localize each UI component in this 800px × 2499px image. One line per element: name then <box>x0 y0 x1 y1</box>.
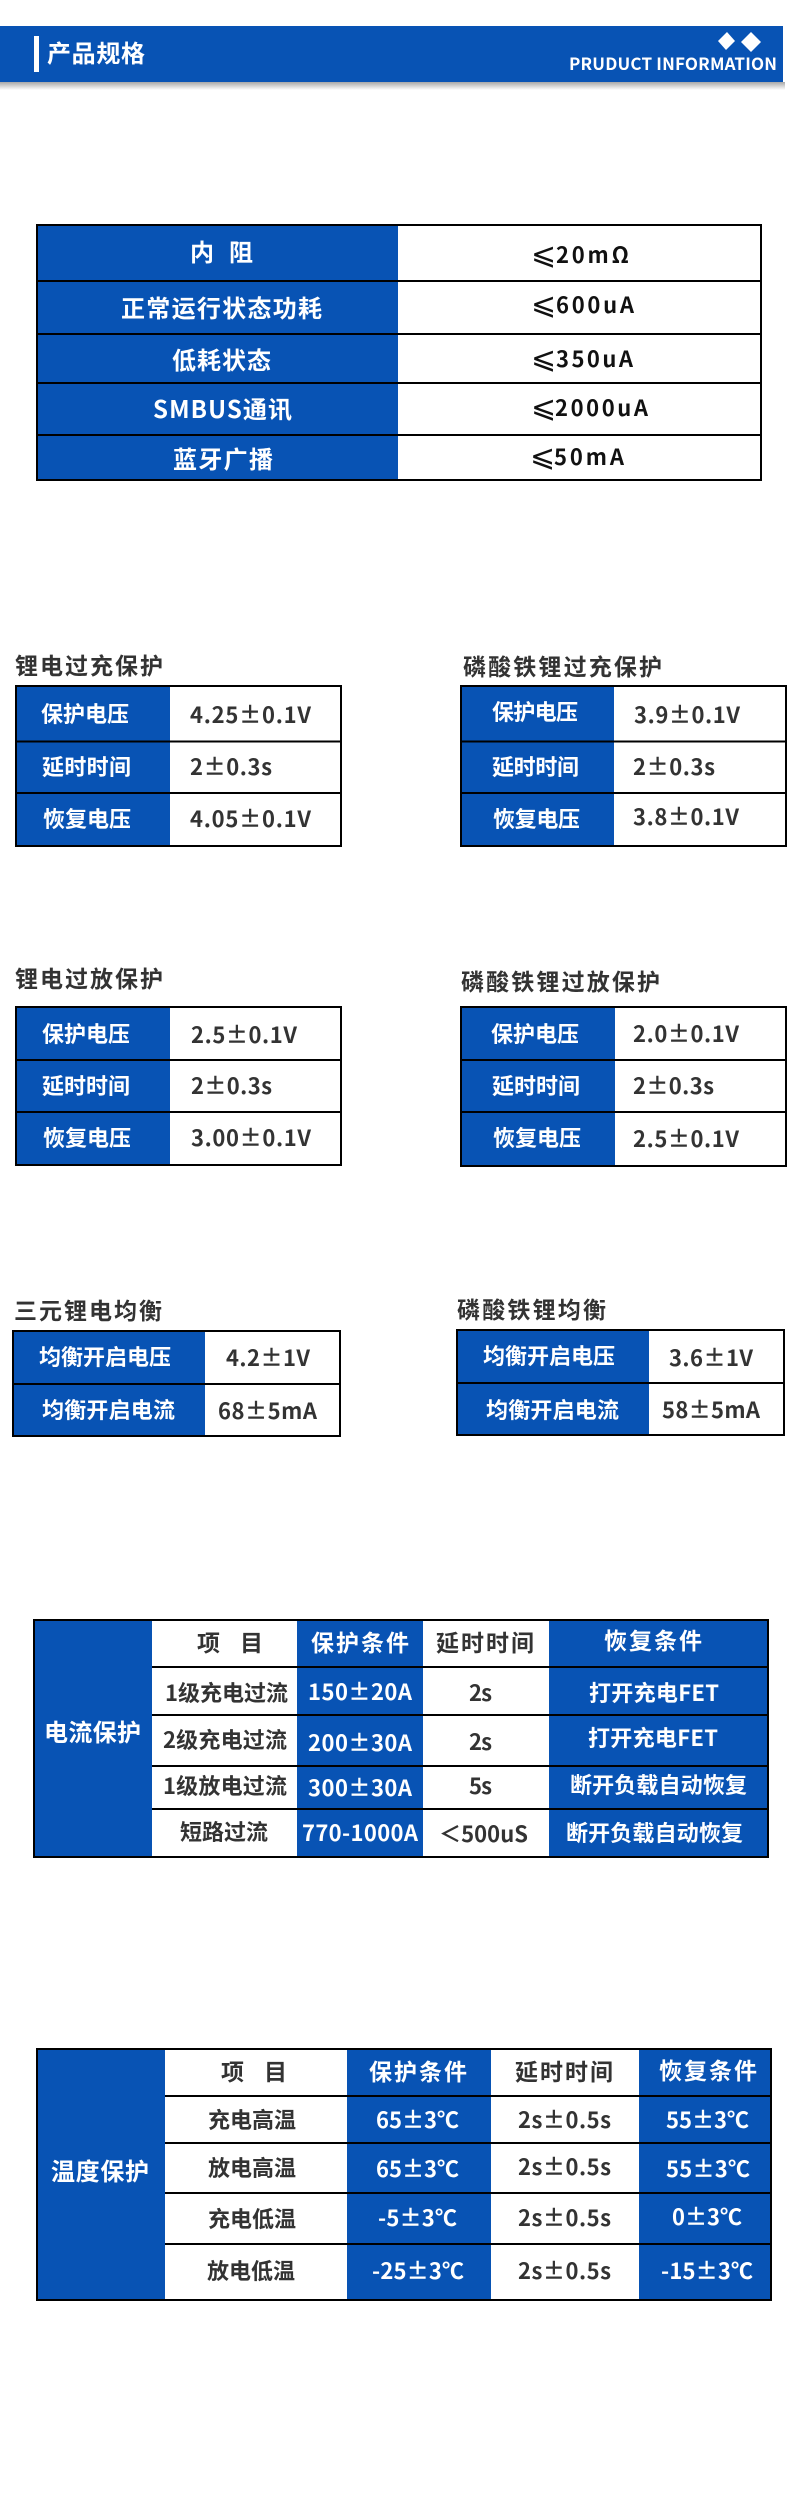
label: 均衡开启电压 <box>39 1340 171 1372</box>
table: lithium overcharge <box>15 685 342 847</box>
recovery: -15±3℃ <box>661 2254 753 2286</box>
row: level 1 discharge overcurrent: 1级放电过流 <box>163 1769 287 1801</box>
recovery: 断开负载自动恢复 <box>570 1768 747 1800</box>
value: bluetooth <box>530 439 625 474</box>
condition: 65±3℃ <box>376 2103 459 2135</box>
table: LFP over-discharge <box>460 1006 787 1167</box>
recovery: 打开充电FET <box>589 1676 719 1708</box>
recovery: 55±3℃ <box>666 2103 749 2135</box>
value: 2.0±0.1V <box>633 1017 739 1049</box>
column header: recovery: 恢复条件 <box>604 1622 702 1656</box>
row: level 2 charge overcurrent: 2级充电过流 <box>163 1723 287 1755</box>
value: 3.00±0.1V <box>191 1121 311 1153</box>
table: LFP balance <box>456 1329 785 1436</box>
row: discharge low temp: 放电低温 <box>207 2254 295 2286</box>
heading: LFP overcharge: 磷酸铁锂过充保护 <box>463 648 662 682</box>
value: bluetooth: 50mA <box>554 440 625 472</box>
value: 2±0.3s <box>191 1069 272 1101</box>
label: bluetooth: 蓝牙广播 <box>173 440 273 475</box>
delay: 2s±0.5s <box>518 2103 611 2135</box>
label: normal power consumption: 正常运行状态功耗 <box>121 289 322 324</box>
table: ternary lithium balance <box>12 1330 341 1437</box>
title accent bar <box>34 36 39 72</box>
delay: 2s±0.5s <box>518 2201 611 2233</box>
row header: temperature protection: 温度保护 <box>51 2152 149 2187</box>
recovery: 0±3℃ <box>672 2200 742 2232</box>
value: internal resistance: ⩽ <box>531 237 556 272</box>
value: 2±0.3s <box>633 1069 714 1101</box>
label: 均衡开启电流 <box>42 1393 175 1425</box>
value: 3.6±1V <box>669 1341 753 1373</box>
label: 均衡开启电流 <box>486 1393 619 1425</box>
value: internal resistance: 20mΩ <box>556 238 629 270</box>
value: 4.2±1V <box>226 1341 310 1373</box>
delay: 2s±0.5s <box>518 2150 611 2182</box>
condition: 300±30A <box>308 1771 413 1803</box>
value: bluetooth: ⩽ <box>530 439 555 474</box>
column header: recovery: 恢复条件 <box>659 2052 757 2086</box>
row: short circuit: 短路过流 <box>180 1815 268 1847</box>
label: 延时时间 <box>492 1069 580 1101</box>
value: 2±0.3s <box>190 750 272 782</box>
delay: 2s <box>469 1725 492 1757</box>
recovery: 打开充电FET <box>588 1721 718 1753</box>
column header: protection condition: 保护条件 <box>311 1624 409 1658</box>
value: low power state: 350uA <box>556 342 634 374</box>
heading: lithium over-discharge: 锂电过放保护 <box>15 960 163 994</box>
label: 恢复电压 <box>493 802 580 834</box>
delay: ＜500uS <box>439 1817 528 1849</box>
label: 保护电压 <box>42 1017 130 1049</box>
value: normal power consumption <box>531 287 635 322</box>
condition: 770-1000A <box>302 1816 419 1848</box>
table: current protection <box>33 1619 769 1858</box>
value: 3.8±0.1V <box>633 800 739 832</box>
label: 恢复电压 <box>43 802 131 834</box>
row header: current protection: 电流保护 <box>44 1713 141 1748</box>
row: discharge high temp: 放电高温 <box>208 2151 296 2183</box>
value: low power state: ⩽ <box>531 341 556 376</box>
value: 58±5mA <box>662 1393 761 1425</box>
subtitle: PRUDUCT INFORMATION <box>569 50 777 75</box>
condition: 65±3℃ <box>376 2152 459 2184</box>
delay: 2s±0.5s <box>518 2254 611 2286</box>
label: 延时时间 <box>42 750 131 782</box>
heading: LFP over-discharge: 磷酸铁锂过放保护 <box>461 963 660 997</box>
value: 3.9±0.1V <box>634 698 740 730</box>
header banner <box>0 26 785 90</box>
table: temperature protection <box>36 2048 772 2301</box>
label: SMBUS: SMBUS通讯 <box>153 390 292 425</box>
condition: -25±3℃ <box>372 2254 464 2286</box>
value: 4.05±0.1V <box>190 802 311 834</box>
value: low power state <box>531 341 634 376</box>
delay: 5s <box>469 1769 492 1801</box>
label: 恢复电压 <box>493 1121 581 1153</box>
table: LFP overcharge <box>460 685 787 847</box>
condition: -5±3℃ <box>378 2201 457 2233</box>
value: SMBUS: ⩽ <box>531 390 556 425</box>
label: low power state: 低耗状态 <box>172 341 271 376</box>
column header: protection condition: 保护条件 <box>369 2053 467 2087</box>
label: internal resistance: 内 阻 <box>190 233 253 268</box>
row: charge high temp: 充电高温 <box>208 2103 296 2135</box>
recovery: 55±3℃ <box>666 2152 750 2184</box>
delay: 2s <box>469 1676 492 1708</box>
row: level 1 charge overcurrent: 1级充电过流 <box>165 1676 288 1708</box>
recovery: 断开负载自动恢复 <box>566 1816 743 1848</box>
title: 产品规格 <box>47 34 145 69</box>
label: 恢复电压 <box>43 1121 131 1153</box>
value: normal power consumption: 600uA <box>556 288 635 320</box>
heading: ternary lithium balance: 三元锂电均衡 <box>14 1292 162 1326</box>
heading: lithium overcharge: 锂电过充保护 <box>15 647 163 681</box>
value: 68±5mA <box>218 1394 318 1426</box>
label: 均衡开启电压 <box>483 1339 615 1371</box>
value: 4.25±0.1V <box>190 698 311 730</box>
column header: delay: 延时时间 <box>515 2053 613 2087</box>
column header: item: 项 目 <box>221 2053 287 2087</box>
label: 保护电压 <box>41 697 129 729</box>
value: 2.5±0.1V <box>191 1018 297 1050</box>
condition: 150±20A <box>308 1675 413 1707</box>
label: 保护电压 <box>491 1017 579 1049</box>
row: charge low temp: 充电低温 <box>208 2202 296 2234</box>
value: internal resistance <box>531 237 629 272</box>
value: normal power consumption: ⩽ <box>531 287 556 322</box>
column header: item: 项 目 <box>197 1624 263 1658</box>
label: 延时时间 <box>42 1069 130 1101</box>
icon: diamonds <box>718 32 761 52</box>
value: SMBUS: 2000uA <box>555 391 649 423</box>
table: basic specs <box>36 224 762 481</box>
heading: LFP balance: 磷酸铁锂均衡 <box>457 1291 606 1325</box>
condition: 200±30A <box>308 1726 413 1758</box>
value: 2±0.3s <box>633 750 715 782</box>
column header: delay: 延时时间 <box>436 1624 534 1658</box>
table: lithium over-discharge <box>15 1006 342 1166</box>
label: 保护电压 <box>492 695 578 727</box>
label: 延时时间 <box>492 750 579 782</box>
value: 2.5±0.1V <box>633 1122 739 1154</box>
